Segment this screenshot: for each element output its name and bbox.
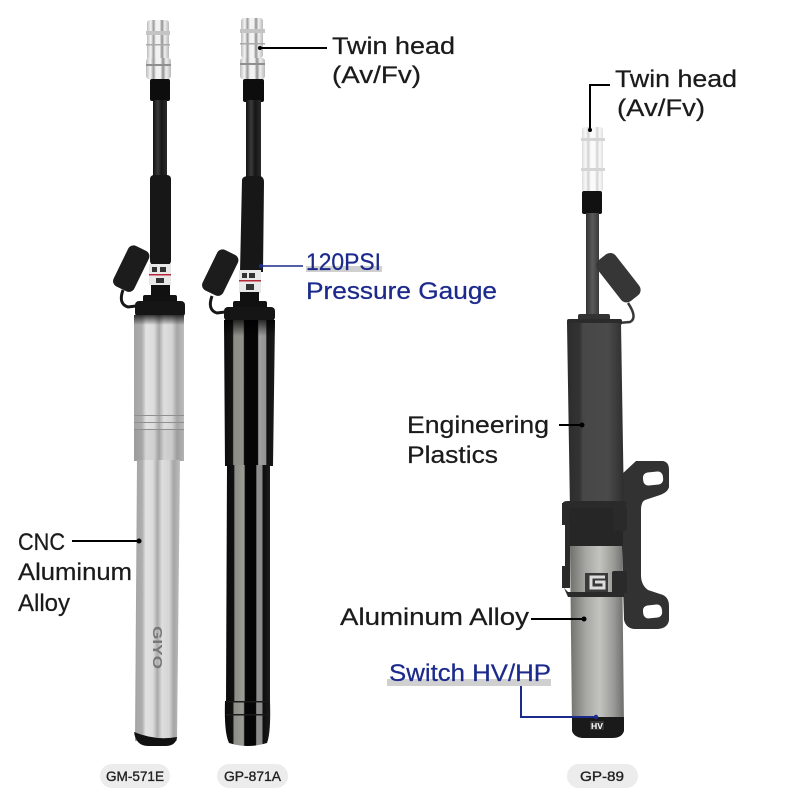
label: GP-89: GP-89 (580, 768, 624, 784)
callout: CNC aluminum alloy: Alloy (18, 590, 70, 617)
plastic barrel (567, 323, 624, 510)
label: GP-89 (567, 764, 638, 788)
callout: aluminum alloy: Aluminum Alloy (340, 604, 529, 631)
callout: aluminum alloy (340, 604, 586, 631)
label: GP-871A: GP-871A (224, 768, 282, 784)
lower barrel (135, 460, 180, 741)
callout: twin head right: (Av/Fv) (617, 95, 705, 122)
callout: twin head right: Twin head (615, 66, 737, 93)
callout: switch HV/HP: Switch HV/HP (389, 660, 551, 687)
pressure gauge scale (149, 264, 171, 285)
brand logo (585, 573, 608, 592)
callout: twin head left: (Av/Fv) (332, 62, 421, 89)
aluminum barrel (570, 545, 624, 726)
pressure gauge scale (239, 270, 261, 293)
callout: pressure gauge: Pressure Gauge (306, 278, 497, 305)
pump: GM-571E (111, 20, 185, 746)
pump: GP-89 (562, 127, 669, 738)
callout: pressure gauge (259, 249, 497, 305)
pump: GP-89: HV (591, 722, 604, 731)
upper barrel (134, 315, 184, 461)
label: GP-871A (217, 764, 288, 788)
callout: twin head right (588, 66, 737, 132)
dust cap (200, 247, 240, 313)
callout: pressure gauge: 120PSI (306, 249, 381, 276)
clamp straps (562, 501, 627, 597)
twin head valve (146, 20, 171, 79)
twin head valve (581, 127, 605, 192)
upper barrel (224, 320, 275, 466)
callout: engineering plastics (407, 412, 584, 469)
label: GM-571E (100, 764, 170, 788)
lower barrel (226, 465, 270, 704)
callout: CNC aluminum alloy (18, 529, 142, 617)
bottom cap (572, 717, 624, 738)
callout: twin head left: Twin head (332, 33, 455, 60)
label: GM-571E: GM-571E (106, 768, 164, 784)
brand mark: GIYO (150, 626, 165, 669)
twin head valve (240, 18, 265, 79)
callout: engineering plastics: Engineering (407, 412, 549, 439)
callout: switch HV/HP (387, 660, 598, 719)
callout: CNC aluminum alloy: CNC (18, 529, 65, 556)
callout: CNC aluminum alloy: Aluminum (18, 559, 132, 586)
pump: GP-871A (200, 18, 275, 746)
dust cap (593, 250, 643, 323)
mounting bracket (620, 461, 669, 629)
callout: engineering plastics: Plastics (407, 442, 498, 469)
dust cap (111, 243, 151, 307)
callout: twin head left (258, 33, 455, 89)
